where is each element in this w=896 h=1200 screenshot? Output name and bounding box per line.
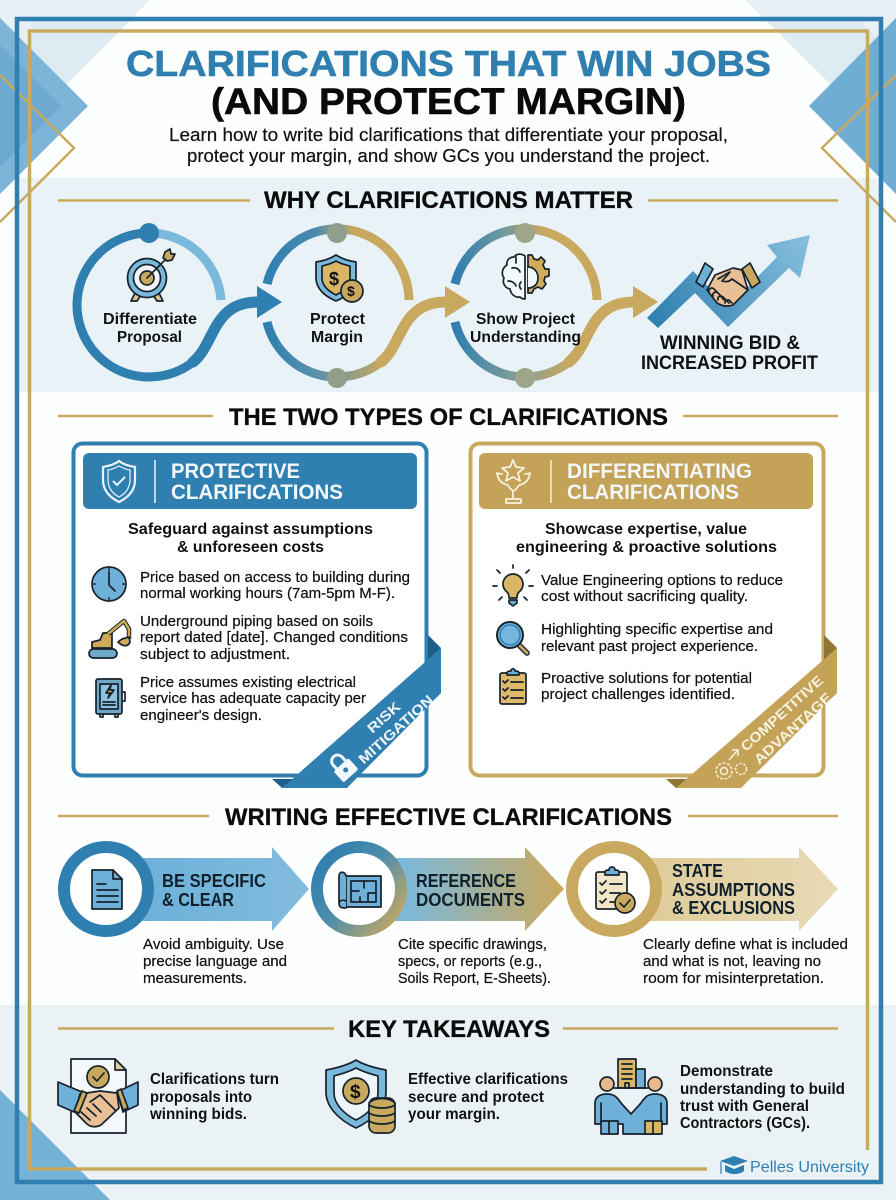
takeaway: protect margin: secure and protect (408, 1089, 544, 1106)
logo: Pelles University: Pelles University (750, 1159, 869, 1176)
heading: writing effective clarifications: WRITING EFFECTIVE CLARIFICATIONS (225, 804, 672, 831)
step: state assumptions and exclusions: room for misinterpretation. (643, 970, 824, 987)
item: electrical service: service has adequate capacity per (140, 690, 366, 707)
panel: key takeaways (58, 1016, 845, 1134)
icon: clock (92, 567, 126, 601)
step: reference documents: Cite specific drawings, (398, 936, 547, 953)
item: working hours: Price based on access to building during (140, 569, 410, 586)
icon: excavator (89, 621, 130, 658)
icon: light bulb (493, 565, 533, 606)
step: be specific and clear: Avoid ambiguity. Use (143, 936, 284, 953)
step: state assumptions and exclusions: & EXCLUSIONS (672, 898, 795, 918)
step: state assumptions and exclusions: Clearly define what is included (643, 936, 848, 953)
step: state assumptions and exclusions: STATE (672, 861, 723, 881)
takeaway: winning bids: winning bids. (149, 1106, 247, 1123)
step: be specific and clear: & CLEAR (162, 890, 234, 910)
icon: magnifier (497, 622, 527, 653)
step: differentiate proposal: Differentiate (103, 311, 197, 328)
step: show project understanding: Understanding (470, 329, 581, 346)
item: proactive solutions: Proactive solutions for potential (541, 670, 752, 687)
panel header (479, 453, 813, 509)
panel subtitle (128, 521, 373, 556)
panel header: CLARIFICATIONS (171, 481, 343, 504)
icon: shield with coin: $ (347, 283, 355, 299)
icon: lock (326, 750, 358, 783)
step: differentiate proposal (77, 223, 282, 377)
panel header: DIFFERENTIATING (567, 460, 752, 483)
ribbon: competitive advantage (666, 635, 837, 788)
step: state assumptions and exclusions: and what is not, leaving no (643, 953, 821, 970)
step: show project understanding: Show Project (476, 311, 576, 328)
ribbon: risk mitigation (272, 635, 441, 788)
heading: the two types of clarifications: THE TWO TYPES OF CLARIFICATIONS (229, 404, 668, 431)
step: reference documents: DOCUMENTS (416, 890, 525, 910)
arrow (393, 847, 564, 931)
logo: Pelles University (720, 1156, 869, 1176)
takeaway: winning bids: proposals into (150, 1089, 252, 1106)
step: state assumptions and exclusions (572, 847, 848, 987)
item: working hours: normal working hours (7am-5pm M-F). (140, 585, 395, 602)
arrow (140, 847, 309, 931)
subtitle: protect your margin, and show GCs you understand the project. (187, 145, 710, 166)
item: value engineering (493, 565, 783, 606)
panel header: PROTECTIVE (171, 460, 300, 483)
item: electrical service (96, 674, 366, 724)
step: differentiate proposal: Proposal (117, 329, 182, 346)
icon: proposal handshake (58, 1059, 138, 1133)
takeaway: build trust: trust with General (680, 1098, 809, 1115)
ribbon: competitive advantage: ADVANTAGE (751, 689, 835, 767)
icon: target (128, 249, 175, 301)
icon: brain and gear (502, 254, 549, 299)
step: state assumptions and exclusions: ASSUMPTIONS (672, 880, 795, 900)
outcome: winning bid: INCREASED PROFIT (641, 352, 818, 374)
icon: shield and coins: $ (350, 1082, 361, 1103)
takeaway: build trust: Demonstrate (680, 1063, 773, 1080)
icon: handshake (696, 263, 760, 306)
takeaway: winning bids (58, 1059, 279, 1133)
step: show project understanding (455, 223, 658, 388)
panel: protective clarifications (74, 444, 441, 788)
arrow: rising profit (647, 235, 810, 328)
item: electrical service: Price assumes existing electrical (140, 674, 356, 691)
item: electrical service: engineer's design. (140, 707, 262, 724)
item: working hours (92, 567, 410, 602)
takeaway: build trust: understanding to build (680, 1081, 845, 1098)
icon: gears (716, 750, 746, 779)
item: value engineering: cost without sacrificing quality. (541, 588, 748, 605)
outcome: winning bid: WINNING BID & (660, 332, 800, 354)
item: underground piping (89, 613, 408, 663)
panel header (83, 453, 417, 509)
arrow (648, 847, 838, 931)
step: reference documents: Soils Report, E-Sheets). (398, 970, 551, 987)
icon: blueprint (339, 872, 381, 908)
outcome: winning bid (641, 235, 818, 374)
item: expertise (497, 621, 773, 655)
item: underground piping: Underground piping based on soils (140, 613, 373, 630)
icon: document (92, 870, 122, 909)
panel subtitle: & unforeseen costs (177, 539, 324, 556)
panel subtitle: Showcase expertise, value (545, 521, 747, 538)
step: be specific and clear (64, 847, 309, 987)
step: be specific and clear: BE SPECIFIC (162, 871, 266, 891)
subtitle (169, 124, 728, 166)
step: reference documents: REFERENCE (416, 871, 516, 891)
title: CLARIFICATIONS THAT WIN JOBS (126, 43, 771, 84)
ribbon: risk mitigation: MITIGATION (355, 692, 436, 767)
takeaway: protect margin: your margin. (408, 1106, 500, 1123)
icon: people and building (595, 1059, 667, 1134)
ribbon: risk mitigation: RISK (364, 698, 403, 736)
panel subtitle: Safeguard against assumptions (128, 521, 373, 538)
item: proactive solutions (500, 669, 752, 704)
icon: shield with coin (316, 255, 363, 302)
heading: why clarifications matter: WHY CLARIFICATIONS MATTER (264, 187, 633, 214)
takeaway: build trust: Contractors (GCs). (680, 1115, 810, 1132)
step: be specific and clear: measurements. (143, 970, 247, 987)
heading: key takeaways: KEY TAKEAWAYS (348, 1016, 550, 1043)
takeaway: build trust (595, 1059, 845, 1134)
step: be specific and clear: precise language and (143, 953, 287, 970)
takeaway: protect margin: Effective clarifications (408, 1071, 568, 1088)
title: (AND PROTECT MARGIN) (211, 81, 686, 122)
subtitle: Learn how to write bid clarifications that differentiate your proposal, (169, 124, 728, 145)
item: underground piping: report dated [date]. Changed conditions (140, 629, 408, 646)
step: reference documents: specs, or reports (e.g., (398, 953, 542, 970)
panel subtitle: engineering & proactive solutions (516, 539, 777, 556)
panel: why clarifications matter (58, 187, 838, 388)
panel header: CLARIFICATIONS (567, 481, 739, 504)
icon: clipboard (500, 669, 526, 704)
icon: checklist (596, 867, 635, 913)
icon: electrical panel (96, 679, 125, 717)
icon: shield and coins (326, 1060, 395, 1133)
icon: shield with coin: $ (329, 269, 339, 289)
takeaway: protect margin (326, 1060, 568, 1133)
item: expertise: Highlighting specific expertise and (541, 621, 773, 638)
step: protect margin: Protect (310, 311, 366, 328)
item: value engineering: Value Engineering options to reduce (541, 572, 783, 589)
step: reference documents (317, 847, 564, 987)
ribbon: competitive advantage: COMPETITIVE (737, 672, 826, 754)
step: protect margin (267, 223, 470, 388)
item: expertise: relevant past project experience. (541, 638, 758, 655)
title (126, 43, 771, 122)
panel subtitle (516, 521, 777, 556)
item: underground piping: subject to adjustment. (140, 646, 290, 663)
step: protect margin: Margin (311, 329, 363, 346)
panel: differentiating clarifications (470, 444, 837, 788)
takeaway: winning bids: Clarifications turn (150, 1071, 279, 1088)
item: proactive solutions: project challenges identified. (541, 686, 735, 703)
